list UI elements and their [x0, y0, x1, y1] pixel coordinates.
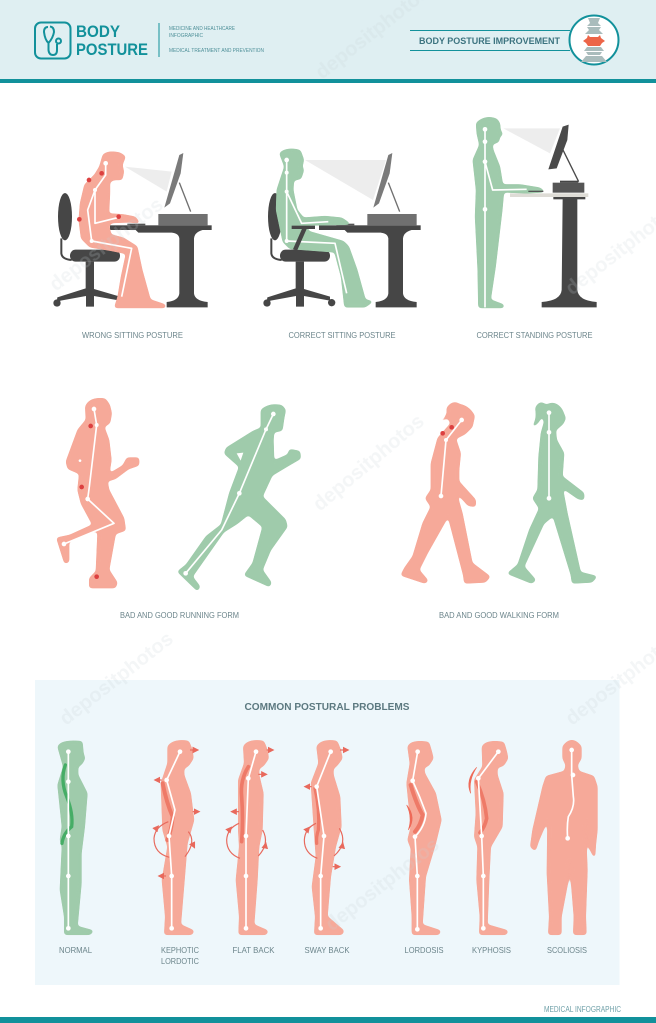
label: kephotic lordotic: LORDOTIC — [161, 956, 199, 966]
figure: lordosis — [407, 742, 441, 934]
label: kyphosis: KYPHOSIS — [472, 945, 511, 955]
icon: stethoscope — [35, 22, 70, 58]
figure: good walking form — [508, 403, 596, 583]
figure: scoliosis — [531, 741, 597, 934]
label: running form: BAD AND GOOD RUNNING FORM — [120, 610, 239, 620]
figure: sway back — [304, 741, 346, 934]
figure: wrong sitting posture — [53, 152, 212, 307]
watermark: depositphotos — [56, 628, 178, 730]
label: correct standing: CORRECT STANDING POSTURE — [476, 330, 593, 340]
label: normal: NORMAL — [59, 945, 92, 955]
figure: correct standing posture — [473, 118, 597, 307]
logo title: BODY — [76, 22, 121, 41]
header band — [0, 0, 656, 83]
label: walking form: BAD AND GOOD WALKING FORM — [439, 610, 559, 620]
label: lordosis: LORDOSIS — [404, 945, 444, 955]
watermark: depositphotos — [46, 194, 168, 296]
label: flat back: FLAT BACK — [232, 945, 275, 955]
label: correct sitting: CORRECT SITTING POSTURE — [288, 330, 396, 340]
header subtitle: MEDICINE AND HEALTHCARE — [169, 26, 235, 32]
figure: flat back — [227, 741, 271, 934]
label: kephotic lordotic: KEPHOTIC — [161, 945, 199, 955]
figure: kephotic lordotic — [154, 741, 197, 934]
figure: normal — [58, 742, 93, 934]
label: wrong sitting: WRONG SITTING POSTURE — [82, 330, 183, 340]
figure: bad running form — [57, 399, 138, 587]
header subtitle: MEDICAL TREATMENT AND PREVENTION — [169, 48, 264, 54]
figure: correct sitting posture — [263, 149, 421, 307]
footer bar — [0, 1017, 656, 1023]
heading: common postural problems: COMMON POSTURAL PROBLEMS — [244, 701, 410, 713]
figure: bad walking form — [402, 403, 489, 583]
label: scoliosis: SCOLIOSIS — [547, 945, 587, 955]
figure: kyphosis — [469, 742, 507, 934]
label: kephotic lordotic — [161, 945, 199, 966]
icon: spine — [570, 16, 618, 64]
header subtitle: INFOGRAPHIC — [169, 33, 203, 39]
heading: body posture improvement: BODY POSTURE IMPROVEMENT — [419, 36, 560, 47]
watermark: depositphotos — [322, 834, 444, 936]
figure: good running form — [178, 405, 300, 590]
footer label: MEDICAL INFOGRAPHIC — [544, 1005, 621, 1014]
header band: POSTURE — [76, 40, 148, 59]
label: sway back: SWAY BACK — [304, 945, 350, 955]
header subtitle — [169, 26, 264, 54]
panel: common postural problems — [35, 680, 620, 985]
watermark: depositphotos — [309, 410, 429, 516]
